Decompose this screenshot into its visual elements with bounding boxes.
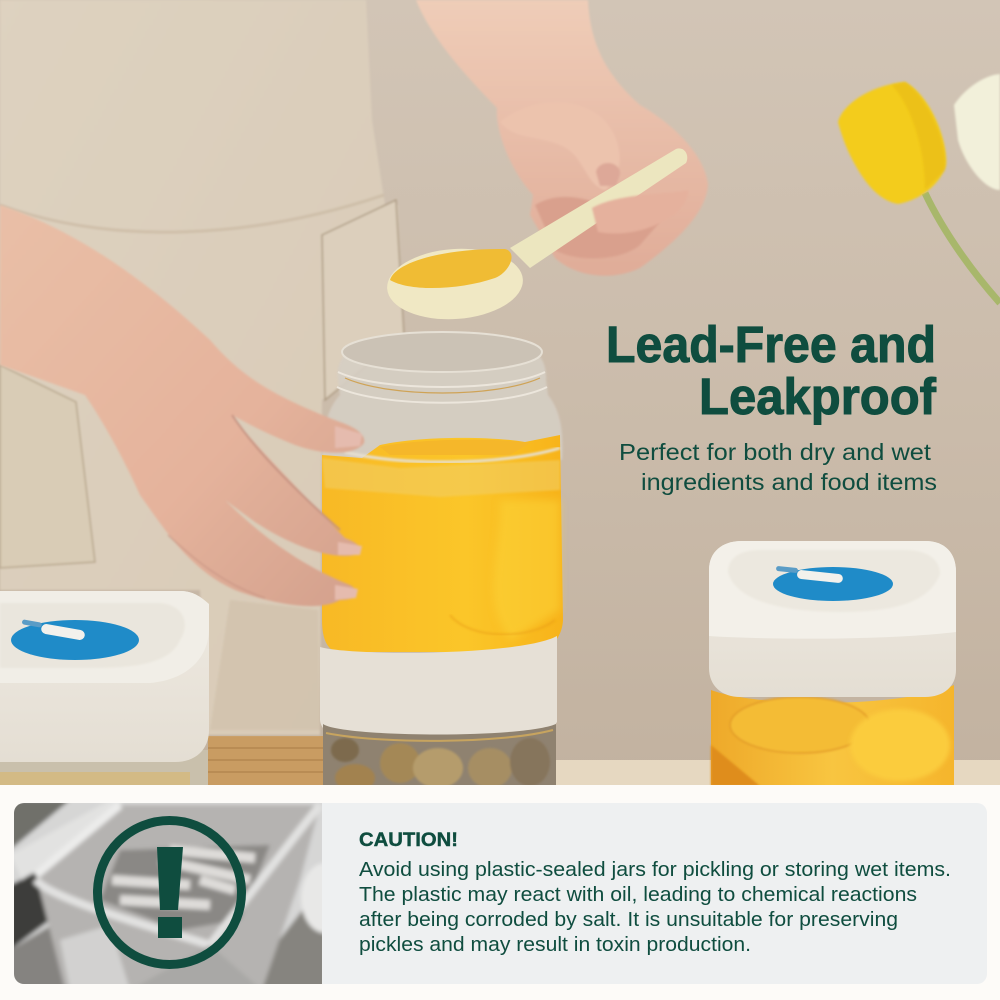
warning icon bbox=[98, 820, 242, 964]
apron bbox=[0, 0, 404, 735]
stem bbox=[925, 193, 1000, 303]
panel background bbox=[14, 803, 987, 984]
lower arm and hand bbox=[0, 205, 364, 606]
white valve bbox=[776, 566, 843, 583]
center jar bbox=[320, 332, 563, 792]
heading: Lead-Free and bbox=[606, 316, 936, 373]
table surface bbox=[208, 736, 1000, 786]
right jar fruit contents bbox=[711, 685, 954, 786]
right jar lid bbox=[709, 541, 956, 697]
white lid band bbox=[320, 636, 557, 737]
caution body text: The plastic may react with oil, leading to chemical reactions bbox=[359, 884, 917, 906]
subheading: ingredients and food items bbox=[641, 469, 937, 495]
white valve bbox=[22, 619, 86, 641]
lower jar with nuts bbox=[323, 724, 556, 785]
caution body text: Avoid using plastic-sealed jars for pickling or storing wet items. bbox=[359, 859, 951, 881]
right jar bbox=[709, 541, 956, 786]
upper hand holding spoon bbox=[416, 0, 708, 276]
left jar lid bbox=[0, 591, 209, 762]
subheading bbox=[619, 439, 937, 495]
panel: caution bbox=[10, 800, 987, 990]
white tulip bbox=[954, 74, 1000, 190]
tulips bbox=[838, 74, 1000, 303]
photo: hands and jars in kitchen bbox=[0, 0, 1000, 792]
left jar bbox=[0, 591, 209, 786]
jar rim highlight bbox=[345, 448, 560, 462]
caution title: CAUTION! bbox=[359, 830, 458, 851]
wall background bbox=[0, 0, 1000, 785]
fingers over spoon handle bbox=[592, 194, 658, 234]
spoon bbox=[385, 148, 687, 324]
yellow tulip bbox=[838, 82, 946, 204]
blue seal bbox=[773, 567, 893, 601]
blue seal bbox=[11, 620, 139, 660]
heading bbox=[606, 316, 937, 425]
caution body text: pickles and may result in toxin production. bbox=[359, 934, 751, 956]
heading: Leakproof bbox=[699, 368, 937, 425]
jar liquid bbox=[322, 435, 563, 652]
left jar base with nuts bbox=[0, 750, 208, 786]
photo: plastic container bbox=[14, 803, 322, 984]
jar neck and shoulder bbox=[322, 357, 563, 460]
subheading: Perfect for both dry and wet bbox=[619, 439, 932, 465]
caution body text bbox=[359, 859, 951, 956]
caution body text: after being corroded by salt. It is unsuitable for preserving bbox=[359, 909, 898, 931]
